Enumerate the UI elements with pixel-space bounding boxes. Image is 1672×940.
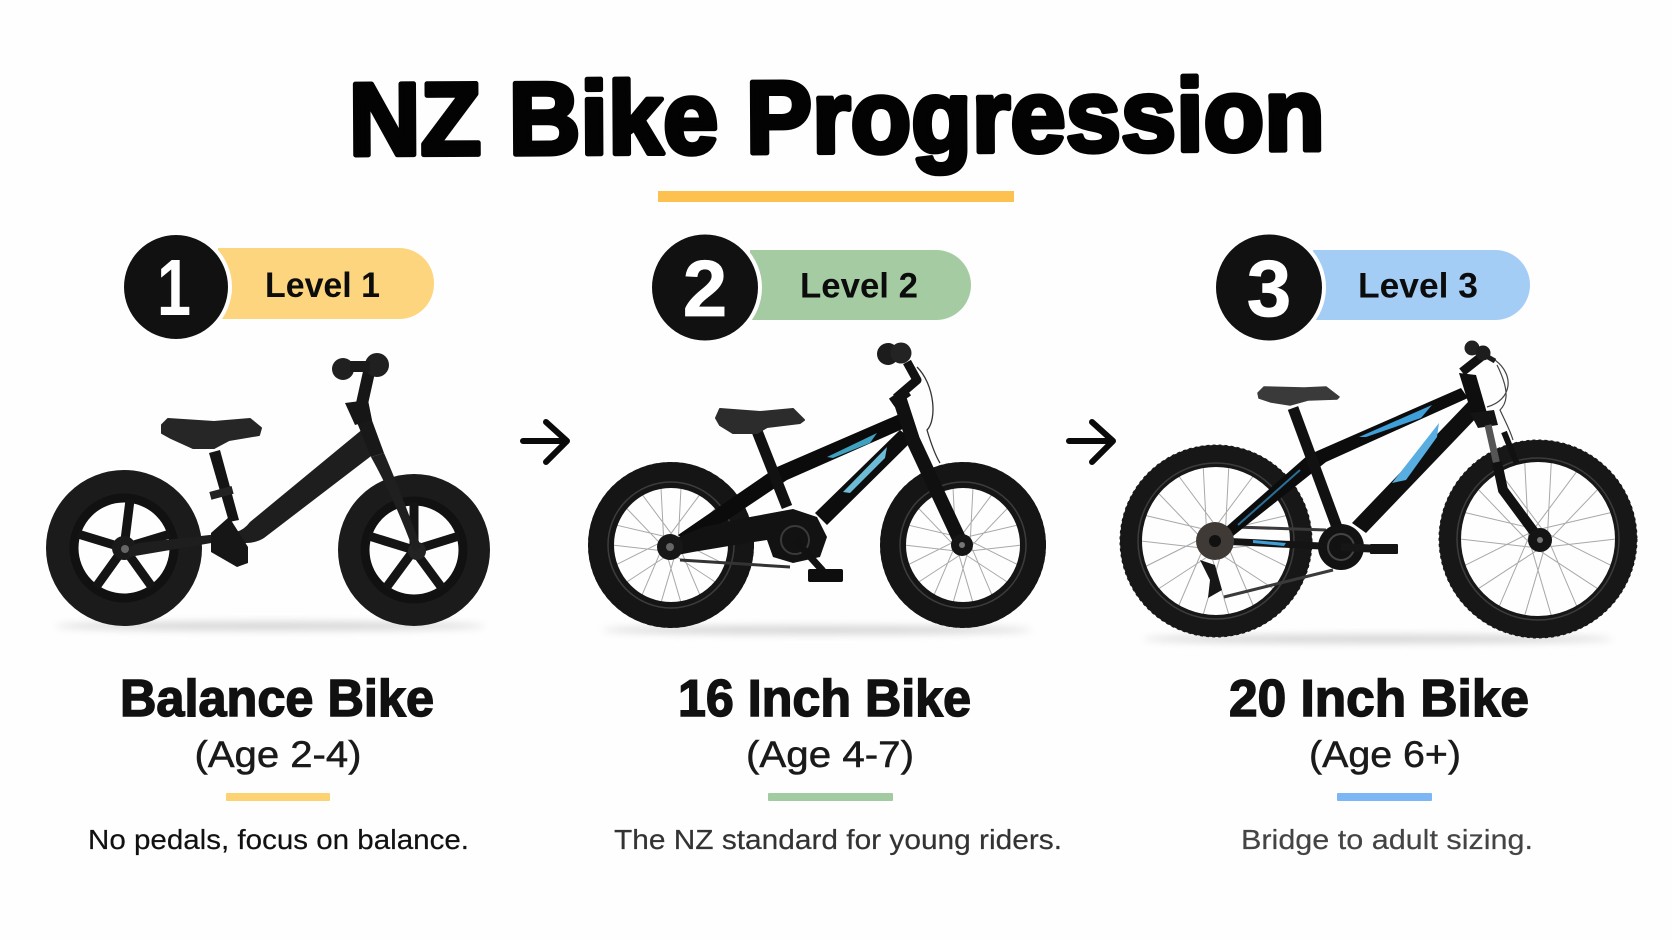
pedal <box>808 569 843 582</box>
blue frame accents <box>827 433 877 458</box>
front wheel <box>1440 441 1636 637</box>
badge: level 3: Level 3 <box>1358 266 1478 306</box>
rear wheel <box>1121 446 1311 636</box>
heading: Balance Bike <box>120 670 434 728</box>
bike: 16 inch <box>590 342 1044 634</box>
age: (Age 6+) <box>1309 734 1461 775</box>
frame <box>678 413 905 545</box>
arrow 2 <box>1069 422 1113 462</box>
bike: 20 inch <box>1121 340 1636 643</box>
handlebar and grips <box>1462 357 1481 372</box>
heading: 20 Inch Bike <box>1229 670 1529 728</box>
badge: level 1: Level 1 <box>265 266 380 305</box>
colour rule <box>1337 793 1432 801</box>
chainguard and crank <box>672 509 827 563</box>
description: The NZ standard for young riders. <box>614 824 1062 855</box>
panel: level 3 20 inch bike <box>1121 230 1636 855</box>
badge: level 2: Level 2 <box>800 266 918 306</box>
title: NZ Bike Progression <box>349 57 1325 177</box>
blue frame accents <box>1359 405 1432 437</box>
badge: level 3 <box>1212 230 1530 344</box>
rear wheel <box>58 482 190 614</box>
head tube and suspension fork <box>1459 373 1552 552</box>
badge: level 2: 2 <box>683 244 727 333</box>
colour rule <box>226 793 330 801</box>
panel: level 2 16 inch bike <box>590 230 1062 855</box>
chain <box>680 560 790 567</box>
bike: balance bike <box>55 353 485 630</box>
badge: level 2 <box>648 230 971 344</box>
fork and stem <box>356 415 384 457</box>
badge: level 1 <box>120 231 434 343</box>
chainring and crank <box>1318 524 1398 570</box>
cassette and derailleur <box>1196 522 1234 598</box>
age: (Age 4-7) <box>746 734 914 775</box>
fork and head tube <box>900 400 962 545</box>
seat <box>716 409 804 433</box>
colour rule <box>768 793 893 801</box>
brake cable <box>917 367 940 463</box>
frame <box>1217 388 1468 540</box>
description: No pedals, focus on balance. <box>88 824 469 855</box>
title underline <box>658 191 1014 202</box>
age: (Age 2-4) <box>194 734 362 775</box>
badge: level 1: 1 <box>157 243 191 332</box>
seat <box>162 419 261 448</box>
front wheel <box>350 486 478 614</box>
handlebar grips <box>332 358 354 380</box>
grips <box>877 343 899 365</box>
arrow 1 <box>523 422 567 462</box>
description: Bridge to adult sizing. <box>1241 824 1533 855</box>
panel: level 1 balance bike <box>55 231 485 855</box>
chain <box>1224 527 1333 597</box>
heading: 16 Inch Bike <box>678 670 971 728</box>
badge: level 3: 3 <box>1247 244 1291 333</box>
frame <box>128 428 379 557</box>
seat <box>1258 387 1339 405</box>
rear wheel <box>590 464 752 626</box>
cables <box>1487 360 1513 440</box>
front wheel <box>882 464 1044 626</box>
